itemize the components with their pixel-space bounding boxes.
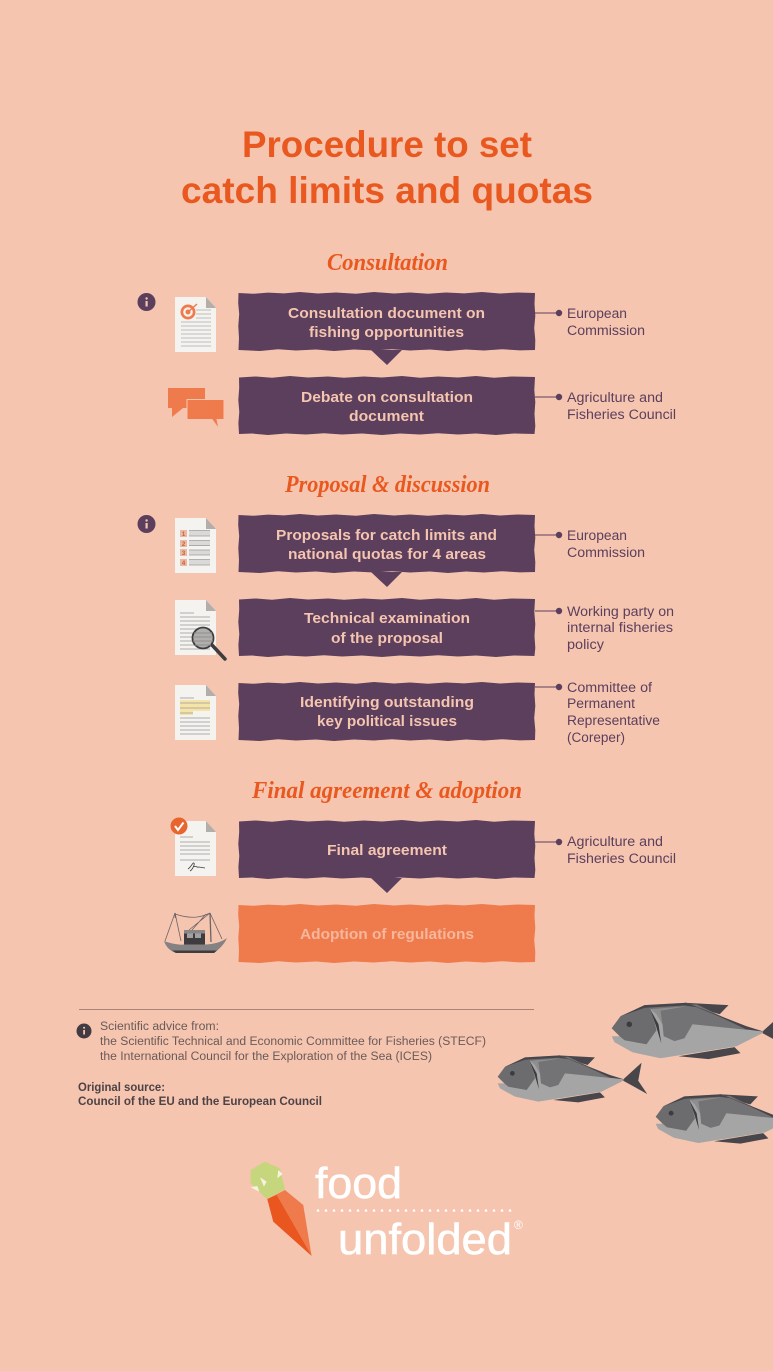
actor: coreper: (Coreper) — [567, 730, 625, 745]
title: catch limits and quotas — [181, 170, 593, 211]
icon: magnified document — [175, 600, 225, 659]
logo: food unfolded: food — [315, 1159, 402, 1208]
icon: fishing boat — [164, 913, 227, 953]
actor: coreper: Committee of — [567, 680, 652, 695]
icon: numbered list document: 4 — [182, 561, 186, 567]
scientific advice note — [76, 1021, 486, 1063]
actor: european commission: European — [567, 528, 627, 543]
scientific advice note: Scientific advice from: — [100, 1021, 219, 1033]
fish: upper right — [612, 1003, 773, 1059]
actor: european commission — [535, 306, 645, 338]
step: identifying political issues — [238, 682, 535, 741]
icon: numbered list document: 2 — [182, 542, 186, 548]
source credit: Council of the EU and the European Council — [78, 1096, 322, 1108]
step: final agreement — [238, 820, 535, 893]
info icon: consultation — [138, 293, 156, 311]
icon: info — [76, 1024, 92, 1038]
title: Procedure to set — [242, 124, 532, 165]
fish school — [498, 1003, 773, 1144]
step: technical examination: of the proposal — [331, 630, 443, 647]
logo: food unfolded: unfolded — [338, 1215, 512, 1264]
step: adoption of regulations — [238, 904, 535, 963]
step: consultation document: Consultation document on — [288, 305, 485, 322]
step: technical examination — [238, 598, 535, 657]
step: consultation document — [238, 292, 535, 365]
actor: agriculture and fisheries council: Agriculture and — [567, 390, 663, 405]
actor: agriculture and fisheries council: Fisheries Council — [567, 407, 676, 422]
icon: numbered list document — [175, 518, 216, 573]
actor: european commission — [535, 528, 645, 560]
heading: proposal and discussion: Proposal & discussion — [284, 472, 490, 498]
actor: european commission: Commission — [567, 323, 645, 338]
heading: final agreement and adoption: Final agreement & adoption — [251, 778, 522, 804]
step: debate: Debate on consultation — [301, 389, 473, 406]
heading: consultation: Consultation — [327, 250, 448, 276]
step: consultation document: fishing opportunities — [309, 324, 464, 341]
scientific advice note: the International Council for the Exploration of the Sea (ICES) — [100, 1051, 432, 1063]
step: final agreement: Final agreement — [327, 842, 447, 859]
icon: speech bubbles — [168, 388, 224, 429]
icon: signed document with check — [170, 818, 216, 876]
icon: target document — [175, 297, 216, 352]
icon: numbered list document: 3 — [182, 551, 186, 557]
actor: working party: Working party on — [567, 604, 674, 619]
source credit — [78, 1082, 322, 1108]
step: proposals: Proposals for catch limits and — [276, 527, 497, 544]
actor: working party — [535, 604, 674, 652]
actor: agriculture and fisheries council — [535, 390, 676, 422]
icon: numbered list document: 1 — [182, 532, 186, 538]
fish: lower right — [656, 1094, 773, 1144]
title — [181, 124, 593, 211]
actor: agriculture and fisheries council: Agriculture and — [567, 834, 663, 849]
actor: european commission: Commission — [567, 545, 645, 560]
scientific advice note: the Scientific Technical and Economic Committee for Fisheries (STECF) — [100, 1036, 486, 1048]
info icon: proposal — [138, 515, 156, 533]
actor: coreper: Representative — [567, 713, 660, 728]
logo: food unfolded: ® — [514, 1218, 523, 1232]
fish: middle — [498, 1055, 647, 1102]
step: proposals: national quotas for 4 areas — [288, 546, 486, 563]
step: technical examination: Technical examination — [304, 610, 470, 627]
icon: carrot — [251, 1162, 312, 1256]
actor: working party: policy — [567, 637, 604, 652]
step: debate — [238, 376, 535, 435]
actor: european commission: European — [567, 306, 627, 321]
step: identifying political issues: key political issues — [317, 713, 457, 730]
actor: coreper: Permanent — [567, 696, 635, 711]
footer divider — [79, 1009, 534, 1010]
step: identifying political issues: Identifying outstanding — [300, 694, 474, 711]
actor: coreper — [535, 680, 660, 745]
source credit: Original source: — [78, 1082, 165, 1094]
icon: highlighted document — [175, 685, 216, 740]
step: debate: document — [349, 408, 424, 425]
step: adoption of regulations: Adoption of regulations — [300, 926, 474, 943]
actor: working party: internal fisheries — [567, 620, 673, 635]
logo: food unfolded — [251, 1159, 523, 1264]
actor: agriculture and fisheries council — [535, 834, 676, 866]
step: proposals — [238, 514, 535, 587]
actor: agriculture and fisheries council: Fisheries Council — [567, 851, 676, 866]
